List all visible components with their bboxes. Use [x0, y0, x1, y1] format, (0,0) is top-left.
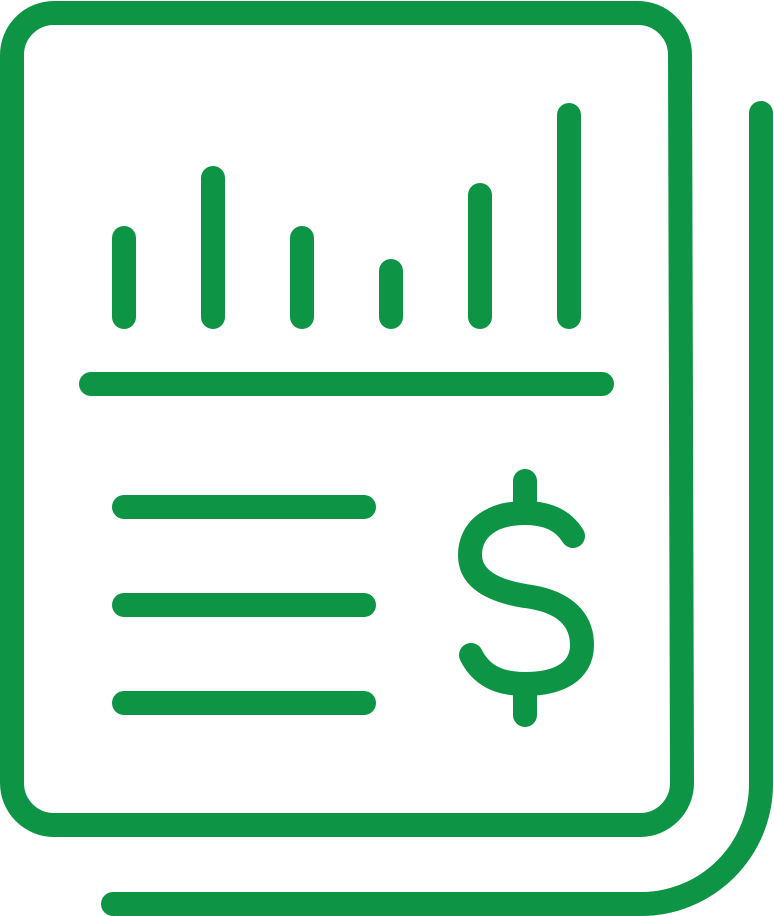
page outline [12, 13, 682, 825]
chart baseline [91, 372, 602, 396]
text lines [124, 507, 364, 703]
back page outline [113, 113, 761, 904]
icon: dollar sign [470, 481, 582, 715]
bar chart [124, 115, 569, 317]
